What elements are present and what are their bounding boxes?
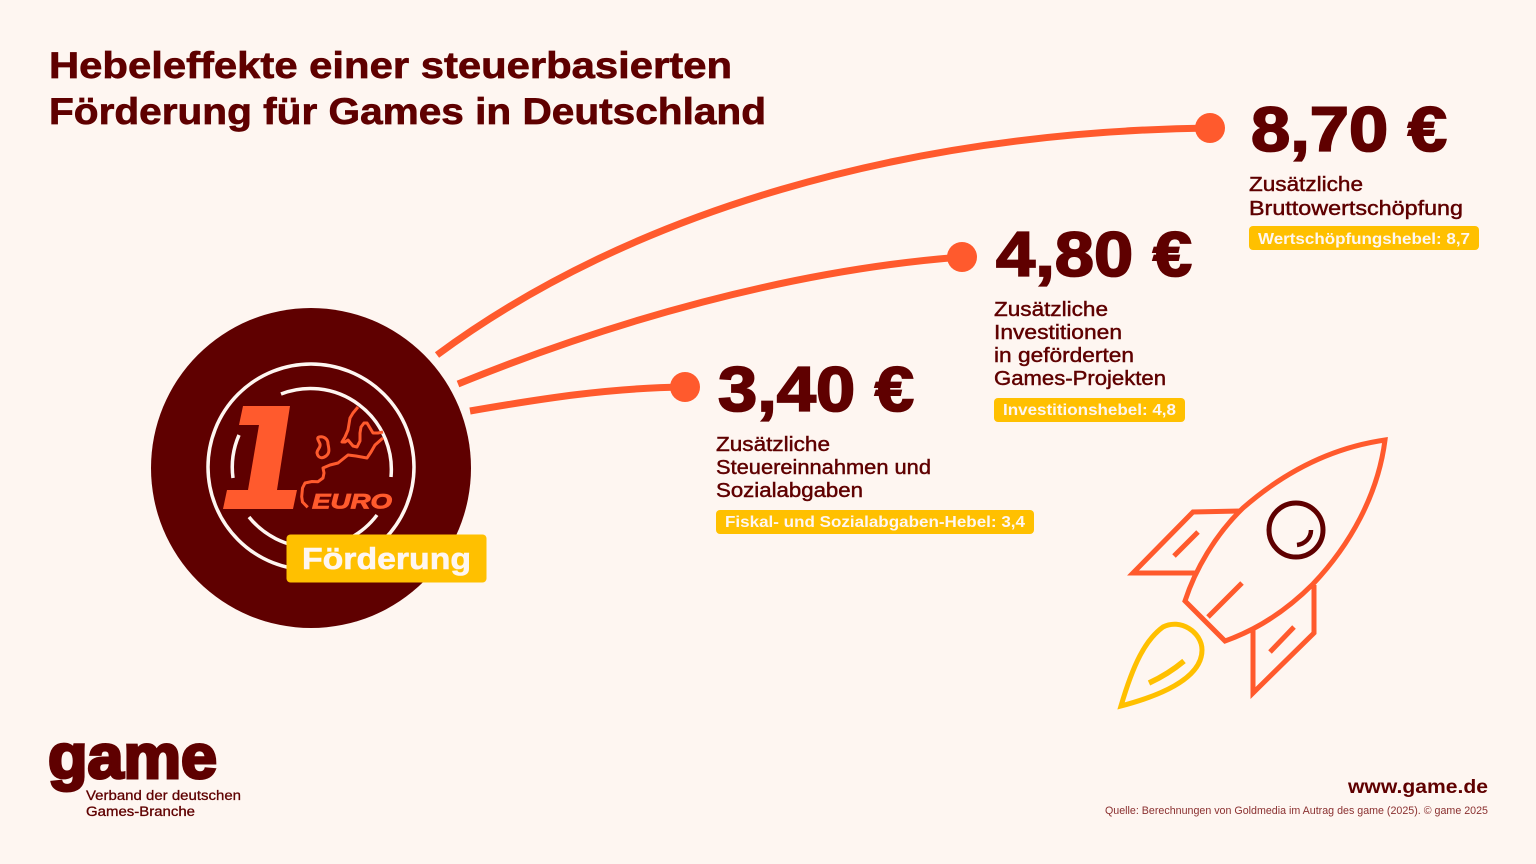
arrow: line to 8,70 € bbox=[437, 113, 1225, 355]
block: 8,70 € Bruttowertschöpfung: 8,70 € bbox=[1251, 95, 1447, 165]
label: Förderung: Förderung bbox=[302, 541, 471, 576]
title bbox=[49, 45, 766, 132]
title: Hebeleffekte einer steuerbasierten bbox=[49, 45, 732, 86]
icon: rocket bbox=[1121, 440, 1385, 706]
block: 4,80 € Investitionen: 4,80 € bbox=[996, 220, 1192, 290]
logo: game: Games-Branche bbox=[86, 804, 195, 819]
block: 3,40 € Steuereinnahmen: Fiskal- und Sozialabgaben-Hebel: 3,4 bbox=[725, 514, 1025, 531]
block: 4,80 € Investitionen: in geförderten bbox=[994, 345, 1134, 367]
block: 3,40 € Steuereinnahmen: Zusätzliche bbox=[716, 434, 830, 456]
block: 4,80 € Investitionen bbox=[994, 220, 1192, 422]
block: 8,70 € Bruttowertschöpfung bbox=[1249, 95, 1479, 250]
logo: game bbox=[48, 723, 241, 819]
block: 8,70 € Bruttowertschöpfung: Zusätzliche bbox=[1249, 174, 1363, 196]
icon: euro coin bbox=[151, 308, 471, 628]
logo: game: game bbox=[48, 723, 217, 792]
website: www.game.de bbox=[1347, 777, 1488, 798]
block: 4,80 € Investitionen: Investitionshebel: 4,8 bbox=[1003, 402, 1176, 419]
logo: game: Verband der deutschen bbox=[86, 788, 241, 803]
block: 3,40 € Steuereinnahmen bbox=[716, 355, 1034, 534]
block: 4,80 € Investitionen: Investitionen bbox=[994, 322, 1122, 344]
arrow: line to 4,80 € bbox=[458, 242, 977, 384]
arrow: line to 3,40 € bbox=[470, 372, 700, 411]
block: 3,40 € Steuereinnahmen: Steuereinnahmen und bbox=[716, 457, 931, 479]
block: 8,70 € Bruttowertschöpfung: Bruttowertschöpfung bbox=[1249, 198, 1463, 220]
block: 4,80 € Investitionen: Zusätzliche bbox=[994, 299, 1108, 321]
block: 8,70 € Bruttowertschöpfung: Wertschöpfungshebel: 8,7 bbox=[1258, 231, 1470, 248]
block: 3,40 € Steuereinnahmen: 3,40 € bbox=[718, 355, 914, 425]
icon: euro coin: EURO bbox=[312, 490, 392, 514]
source note: Quelle: Berechnungen von Goldmedia im Autrag des game (2025). © game 2025 bbox=[1105, 805, 1488, 817]
block: 3,40 € Steuereinnahmen: Sozialabgaben bbox=[716, 480, 863, 502]
block: 4,80 € Investitionen: Games-Projekten bbox=[994, 368, 1166, 390]
title: Förderung für Games in Deutschland bbox=[49, 91, 766, 132]
label: Förderung bbox=[286, 534, 486, 582]
